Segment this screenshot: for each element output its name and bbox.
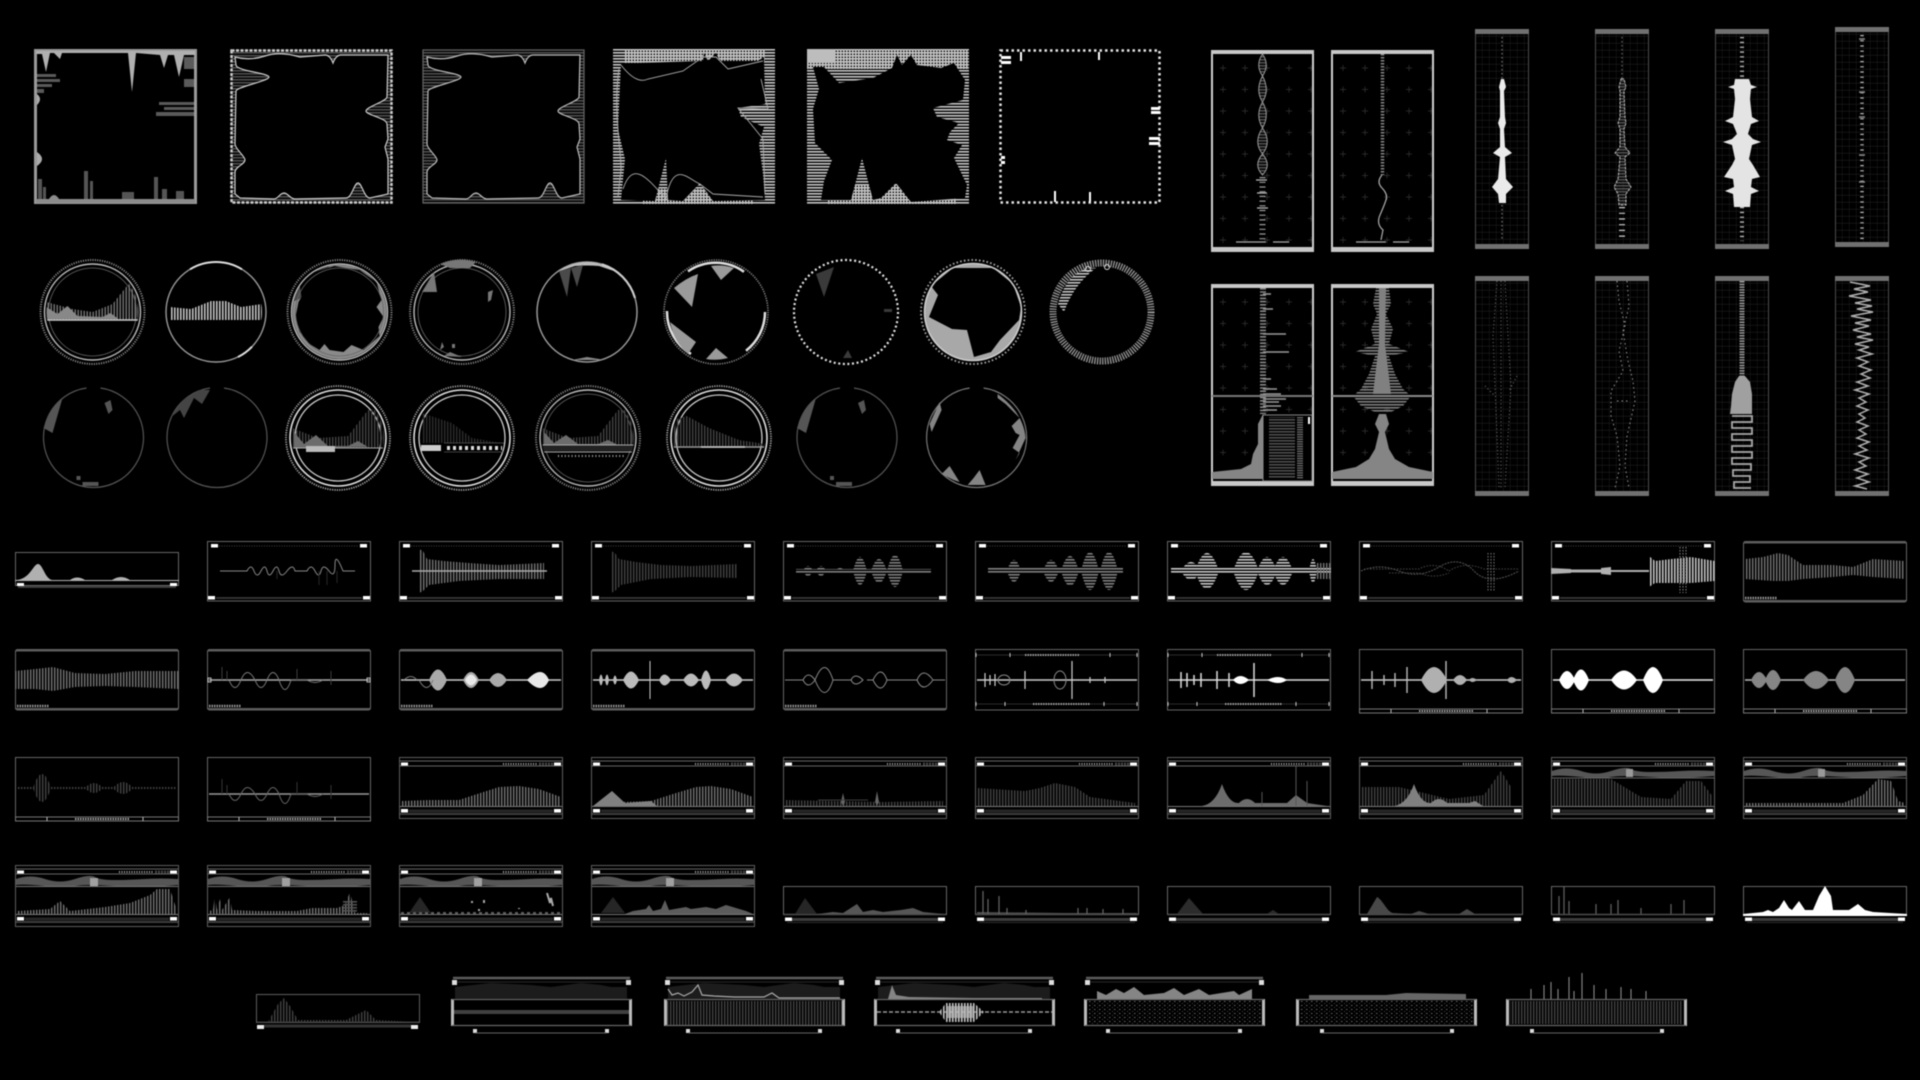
wave 1-7: bright hatched lobes	[1168, 542, 1331, 601]
circle gauge 4: sparse blobs	[410, 260, 514, 364]
module 5: grey mountains and speckle	[1085, 978, 1264, 1033]
panel: square frames row	[36, 49, 1160, 204]
module 3: streaks and bright trace	[665, 978, 844, 1033]
wave 1-3: decaying bars with trace	[400, 542, 562, 601]
oscilloscope D: symmetric spectrum	[1331, 284, 1434, 486]
column 8: jagged trace	[1835, 276, 1889, 496]
wave 2-5: lens outlines	[784, 650, 946, 710]
panel: waveform row 4	[16, 866, 1907, 926]
column 3: bright broad spectrum	[1715, 29, 1769, 249]
wave 1-2: thin wiggle	[208, 542, 370, 601]
panel: circular gauges bottom row	[44, 386, 1027, 490]
wave 4-4: band with low mountains	[592, 866, 754, 926]
wave 3-2: dim line with sine	[208, 758, 370, 821]
wave 3-3: striped hump	[400, 758, 562, 818]
oscilloscope C: half spectrum with inset	[1211, 284, 1314, 486]
oscilloscope A: lens chain	[1211, 50, 1314, 252]
wave 3-6: dim stripes hump	[976, 758, 1138, 818]
panel: tall oscilloscope frames	[1211, 27, 1889, 496]
wave 1-8: sparse dotted trace	[1360, 542, 1522, 601]
circle gauge 7: dotted ring	[794, 260, 898, 364]
square frame 5: heavy hatched blob	[807, 49, 969, 204]
wave 1-5: hatched lobes	[784, 542, 946, 601]
column 5: faint dotted field	[1475, 276, 1529, 496]
panel: bottom module row	[256, 973, 1686, 1033]
circle gauge 10: faint ring	[44, 388, 144, 488]
circle gauge 3: jagged fill	[288, 260, 392, 364]
circle gauge 1: spectrum half	[40, 260, 144, 364]
wave 1-6: hatched lobes	[976, 542, 1138, 601]
wave 3-7: solid humps with spikes	[1168, 758, 1330, 818]
square frame 1: spiked grey	[36, 50, 196, 203]
wave 4-5: short dim mountains	[784, 886, 946, 922]
module 7: tall spikes and hatched band	[1507, 973, 1686, 1033]
wave 4-8: peak and bumps	[1360, 886, 1522, 922]
panel: waveform row 3	[16, 758, 1906, 821]
circle gauge 6: wedge fill ring	[664, 260, 768, 364]
oscilloscope B: thin wiggle	[1331, 50, 1434, 252]
wave 4-1: band and rising stripes	[16, 866, 178, 926]
circle gauge 9: hatched thick ring	[1053, 263, 1151, 361]
wave 4-2: band with spikes and ladder	[208, 866, 370, 926]
column 6: faint dotted outline	[1595, 276, 1649, 496]
square frame 2: dotted outline with bumps	[231, 50, 392, 203]
circle gauge 14: spectrum with mirrored ticks	[536, 386, 640, 490]
wave 2-8: grey-white burst	[1360, 650, 1522, 713]
wave 4-10: bright white peaks	[1743, 886, 1907, 922]
wave 3-4: triangle and hump	[592, 758, 754, 818]
column 2: outlined spine	[1595, 29, 1649, 249]
wave 3-1: dim striped blobs	[16, 758, 178, 821]
column 4: faint dashes	[1835, 27, 1889, 247]
wave 3-8: stripes and hump	[1360, 758, 1522, 818]
circle gauge 5: thin ring with top spikes	[537, 262, 637, 362]
wave 4-3: band with scattered dots	[400, 866, 562, 926]
wave 3-5: low spikes	[784, 758, 946, 818]
column 1: white spine	[1475, 29, 1529, 249]
wave 2-6: spikes with lenses	[976, 650, 1138, 710]
circle gauge 12: double ring with spectrum and label	[286, 386, 390, 490]
module 1: faint spectrum	[256, 994, 420, 1029]
circle gauge 13: double ring with dashed bar	[410, 386, 514, 490]
circle gauge 16: faint ring with blobs	[797, 388, 897, 488]
wave 2-2: line with sine	[208, 650, 370, 710]
module 6: low band and speckle	[1297, 993, 1476, 1033]
wave 3-10: band with right stripes	[1744, 758, 1906, 818]
panel: circular gauges top row	[40, 260, 1151, 364]
circle gauge 11: faint spiked ring	[167, 388, 267, 488]
circle gauge 8: large jagged fill	[921, 260, 1025, 364]
wave 4-6: short spikes	[976, 886, 1138, 922]
circle gauge 15: spectrum with centre line	[667, 386, 771, 490]
module 4: streaks and centre burst	[875, 978, 1054, 1033]
wave 2-10: grey blobs	[1744, 650, 1906, 713]
wave 1-1: peak with baseline	[15, 552, 179, 587]
square frame 3: solid outline with bumps	[423, 50, 584, 203]
wave 2-3: bright blobs	[400, 650, 562, 710]
wave 4-7: dim peak	[1168, 886, 1330, 922]
wave 2-1: dense zigzag	[15, 650, 179, 710]
panel: waveform row 2	[15, 650, 1906, 713]
circle gauge 17: grey jagged ring	[927, 388, 1027, 488]
wave 2-9: white blobs	[1552, 650, 1714, 713]
column 7: hatched spine into sine wave	[1715, 276, 1769, 496]
wave 1-9: band then dense burst	[1551, 542, 1715, 601]
wave 2-4: spikes and blobs	[592, 650, 754, 710]
square frame 4: hatched with contour lines	[613, 49, 775, 204]
circle gauge 2: hump spectrum	[166, 262, 266, 362]
wave 4-9: faint spikes	[1552, 886, 1714, 922]
square frame 6: dotted outline with ticks	[1000, 50, 1160, 202]
wave 1-4: faint decaying bars	[592, 542, 754, 601]
wave 1-10: grey band	[1744, 542, 1906, 602]
wave 3-9: band with dim stripes	[1552, 758, 1714, 818]
panel: waveform row 1	[15, 542, 1906, 602]
module 2: dim streaks	[452, 978, 631, 1033]
wave 2-7: white spikes	[1168, 650, 1330, 710]
